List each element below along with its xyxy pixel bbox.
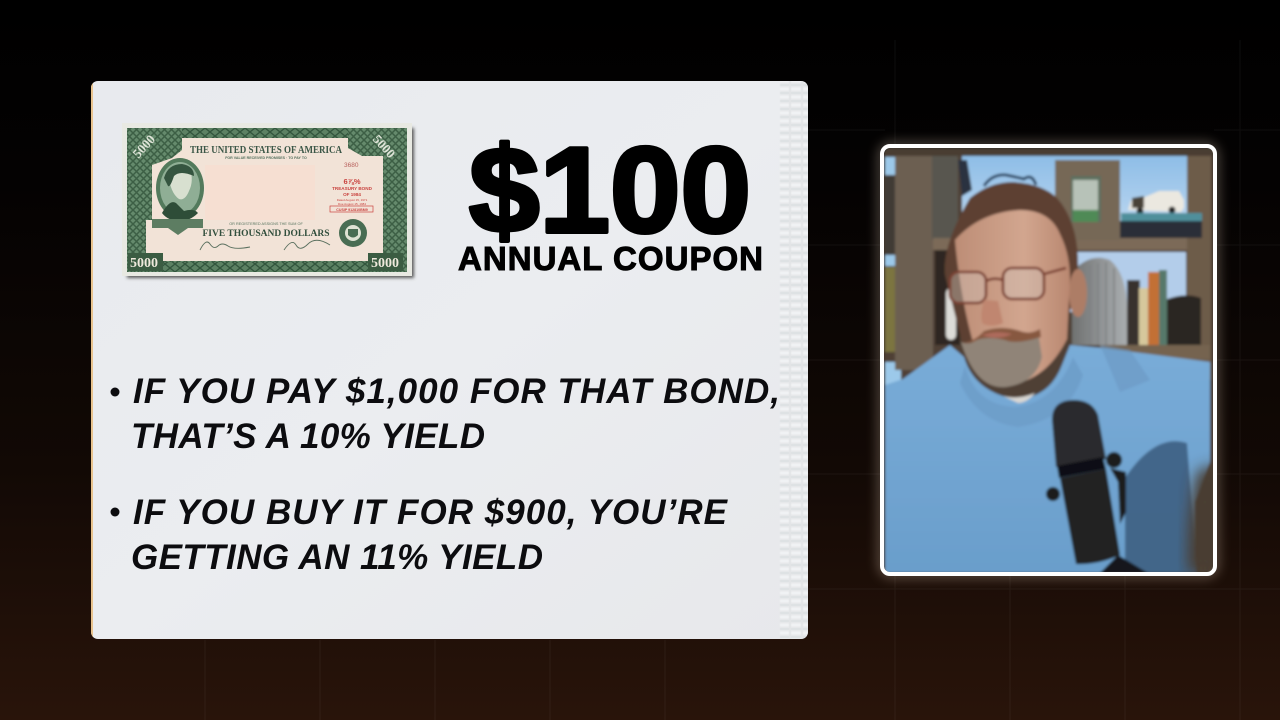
bond subline: FOR VALUE RECEIVED PROMISES · TO PAY TO: [225, 156, 307, 160]
bond banner: [152, 219, 203, 235]
shirt shadow: [1125, 441, 1197, 573]
cable loop on shelf: [984, 175, 1036, 186]
bond seal: [339, 219, 367, 247]
panel: paper sheet: [91, 81, 808, 639]
bond corner numerals: [130, 132, 398, 161]
bond denominations: 5000: [371, 256, 399, 271]
bond denominations: 5000: [130, 256, 158, 271]
bond signatures: [200, 240, 330, 250]
panel: presenter video frame: [882, 146, 1218, 574]
bond denominations: [128, 253, 403, 271]
blurred right edge: [1188, 465, 1218, 573]
toy car and books: [1120, 191, 1202, 238]
blue shirt: [885, 345, 1210, 573]
picture frame on shelf: [1055, 160, 1120, 240]
white glowing border: [882, 146, 1215, 574]
bond red rate block: CUSIP 912810BM9: [336, 208, 368, 212]
heading: $100: $100: [469, 122, 751, 258]
text block: second bullet: IF YOU BUY IT FOR $900, YOU’RE: [133, 493, 729, 532]
ear cup: [946, 288, 956, 340]
bond red rate block: Dated August 15, 1971: [337, 198, 368, 202]
ear: [1069, 269, 1087, 317]
text block: first bullet: [110, 372, 780, 456]
bond serial: 3680: [344, 162, 359, 169]
face: [955, 210, 1070, 384]
bond corner numerals: 5000: [370, 132, 398, 161]
bond portrait: [156, 158, 204, 221]
microphone: [1046, 400, 1148, 573]
text block: second bullet: [110, 493, 729, 577]
hair: [945, 182, 1078, 358]
text block: second bullet: GETTING AN 11% YIELD: [131, 538, 543, 577]
bond payee line: OR REGISTERED ASSIGNS THE SUM OF: [229, 222, 303, 226]
nose: [981, 300, 1003, 326]
bond red rate block: 6⅞%: [343, 177, 361, 186]
bond amount: FIVE THOUSAND DOLLARS: [202, 229, 330, 239]
text block: first bullet: IF YOU PAY $1,000 FOR THAT BOND,: [133, 372, 780, 411]
bond red rate block: OF 1984: [343, 192, 361, 197]
turtleneck collar: [960, 357, 1083, 427]
beard: [961, 329, 1042, 387]
bookshelf background: [884, 148, 1214, 573]
bond red rate block: TREASURY BOND: [332, 186, 373, 191]
bond corner numerals: 5000: [130, 132, 158, 161]
subheading: annual coupon: ANNUAL COUPON: [458, 240, 763, 277]
headrest and lower books: [1072, 258, 1201, 345]
bond red rate block: Due August 15, 1984: [338, 202, 366, 206]
glasses: [950, 268, 1066, 303]
text block: first bullet: THAT’S A 10% YIELD: [131, 417, 485, 456]
bond title: THE UNITED STATES OF AMERICA: [190, 145, 342, 156]
image: treasury bond certificate: [122, 123, 414, 278]
bond red rate block: [330, 177, 373, 212]
